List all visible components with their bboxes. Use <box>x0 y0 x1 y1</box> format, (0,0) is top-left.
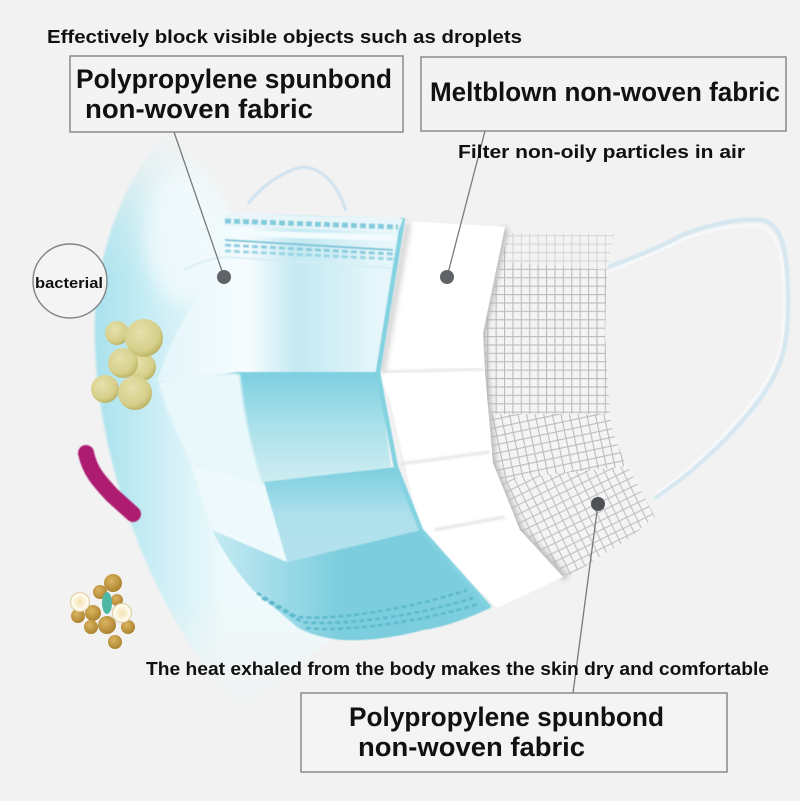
leader line and dot: outer layer <box>174 132 231 284</box>
bottom pleat <box>212 530 490 640</box>
label box: meltblown: Meltblown non-woven fabric <box>430 77 780 107</box>
right edge stripe <box>378 218 490 608</box>
white meltblown layer <box>378 221 566 608</box>
blue face shield shape <box>95 135 330 712</box>
label box: polypropylene outer: Polypropylene spunbond <box>76 64 392 94</box>
bacterial label circle: bacterial <box>35 275 103 292</box>
blue outer layer: pleats <box>157 213 490 640</box>
top pleat <box>157 213 403 382</box>
third pleat blue <box>264 467 421 562</box>
label box: polypropylene outer: non-woven fabric <box>85 94 313 124</box>
right ear loop <box>606 220 788 498</box>
bacteria: magenta rod <box>86 453 133 514</box>
second pleat white fold <box>157 373 263 486</box>
bacterial label circle <box>33 244 107 318</box>
second pleat blue <box>157 372 391 484</box>
bacteria: gold cluster with teal centre <box>70 574 135 649</box>
caption: heat exhaled: The heat exhaled from the body makes the skin dry and comfortable <box>146 658 769 679</box>
label box: polypropylene inner: non-woven fabric <box>358 732 585 762</box>
label box: polypropylene inner: Polypropylene spunbond <box>349 702 664 732</box>
grid inner layer <box>483 233 655 577</box>
label box: polypropylene inner <box>301 693 727 772</box>
top band <box>224 214 403 232</box>
bottom stitches <box>257 590 467 618</box>
third pleat white fold <box>190 463 285 561</box>
bacteria: yellow cluster <box>91 319 163 410</box>
caption: filter particles: Filter non-oily particles in air <box>458 141 745 162</box>
leader line and dot: meltblown layer <box>440 131 485 284</box>
ear loop behind mask <box>248 167 346 211</box>
label box: meltblown <box>421 57 786 131</box>
label box: polypropylene outer <box>70 56 403 132</box>
caption: block droplets: Effectively block visible objects such as droplets <box>47 26 522 47</box>
leader line and dot: inner layer <box>573 497 605 693</box>
